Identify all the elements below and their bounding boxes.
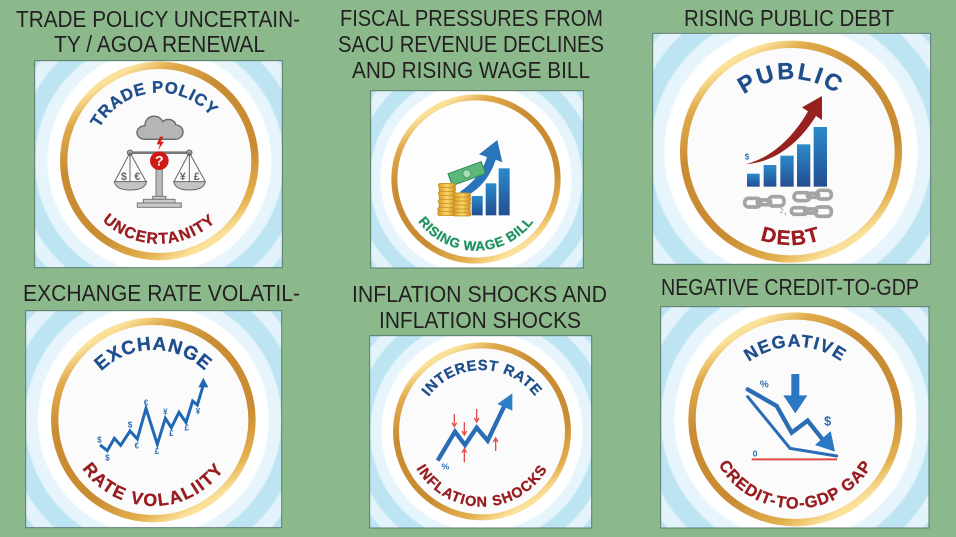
badge text: negative: NEGATIVE (743, 334, 847, 362)
title: inflation shocks (352, 281, 607, 333)
panel: rising wage bill badge (370, 90, 584, 268)
labels: currency symbols: ¥ (163, 408, 168, 417)
chart: declining credit lines (748, 389, 837, 459)
panel: public debt badge (652, 32, 932, 265)
labels: currency symbols: € (144, 398, 149, 407)
title: inflation shocks: INFLATION SHOCKS (379, 307, 581, 333)
labels: currency symbols: £ (184, 424, 189, 433)
icon: cloud, lightning and scales: $ (121, 171, 127, 183)
arrow: red rising curve (746, 96, 822, 164)
badge text: inflation shocks: INFLATION SHOCKS (416, 464, 546, 507)
icon: cloud, lightning and scales: £ (194, 171, 200, 183)
badge text: rising wage bill: RISING WAGE BILL (418, 216, 534, 251)
chart: rising debt bars (747, 127, 827, 187)
icon: cloud, lightning and scales: € (134, 171, 140, 183)
labels: percent, dollar and zero: 0 (753, 449, 758, 459)
labels: currency symbols: $ (105, 453, 110, 462)
label: percent: % (441, 461, 449, 471)
arrow: large down arrow (783, 374, 807, 413)
badge text: debt: DEBT (761, 226, 818, 246)
badge text: credit-to-gdp gap: CREDIT-TO-GDP GAP (720, 460, 868, 509)
panel: negative credit-to-gdp gap badge (660, 306, 930, 528)
labels: percent, dollar and zero: $ (824, 415, 831, 429)
title: fiscal pressures: AND RISING WAGE BILL (352, 57, 590, 83)
badge text: rate volatility: RATE VOLALIITY (82, 462, 221, 506)
title: fiscal pressures (338, 5, 604, 83)
title: rising public debt: RISING PUBLIC DEBT (684, 5, 894, 31)
title: trade policy uncertainty: TY / AGOA RENEWAL (54, 31, 265, 57)
labels: currency symbols: £ (155, 447, 160, 456)
badge text: exchange: EXCHANGE (94, 336, 212, 371)
panel: trade policy uncertainty badge (34, 60, 283, 268)
label: dollar sign: $ (745, 152, 750, 161)
icon: broken chains (745, 190, 831, 216)
title: trade policy uncertainty: TRADE POLICY UNCERTAIN- (16, 6, 300, 32)
labels: currency symbols: ¥ (196, 407, 201, 416)
panel: interest rate and inflation shocks badge (369, 335, 592, 528)
title: negative credit-to-gdp: NEGATIVE CREDIT-TO-GDP (661, 274, 919, 300)
title: fiscal pressures: SACU REVENUE DECLINES (338, 31, 604, 57)
badge text: interest rate: INTEREST RATE (421, 360, 542, 396)
icon: cloud, lightning and scales: ? (155, 153, 164, 169)
badge text: public: PUBLIC (736, 62, 842, 94)
panel: exchange rate volatility badge (25, 310, 282, 528)
labels: percent, dollar and zero (753, 380, 831, 459)
icon: red shock arrows (452, 409, 498, 462)
icon: rising bars with arrow (459, 140, 510, 215)
icon: cloud, lightning and scales (114, 116, 205, 207)
labels: currency symbols: $ (97, 435, 102, 444)
icon: banknote (448, 162, 486, 186)
title: inflation shocks: INFLATION SHOCKS AND (352, 281, 607, 307)
chart: volatile exchange rate line (100, 378, 208, 451)
icon: coin stacks (438, 183, 471, 216)
labels: currency symbols: € (134, 441, 139, 450)
badge text: trade policy: TRADE POLICY (90, 81, 219, 126)
badge text: uncertainty: UNCERTANITY (104, 213, 212, 244)
labels: currency symbols: £ (169, 429, 174, 438)
labels: currency symbols (97, 398, 201, 462)
title: trade policy uncertainty (16, 6, 300, 57)
title: exchange rate volatility: EXCHANGE RATE VOLATIL- (23, 280, 300, 306)
title: fiscal pressures: FISCAL PRESSURES FROM (340, 5, 603, 31)
labels: currency symbols: $ (128, 421, 133, 430)
labels: percent, dollar and zero: % (760, 380, 769, 391)
icon: cloud, lightning and scales: ¥ (180, 171, 186, 183)
chart: zigzag rate arrow (438, 393, 512, 461)
